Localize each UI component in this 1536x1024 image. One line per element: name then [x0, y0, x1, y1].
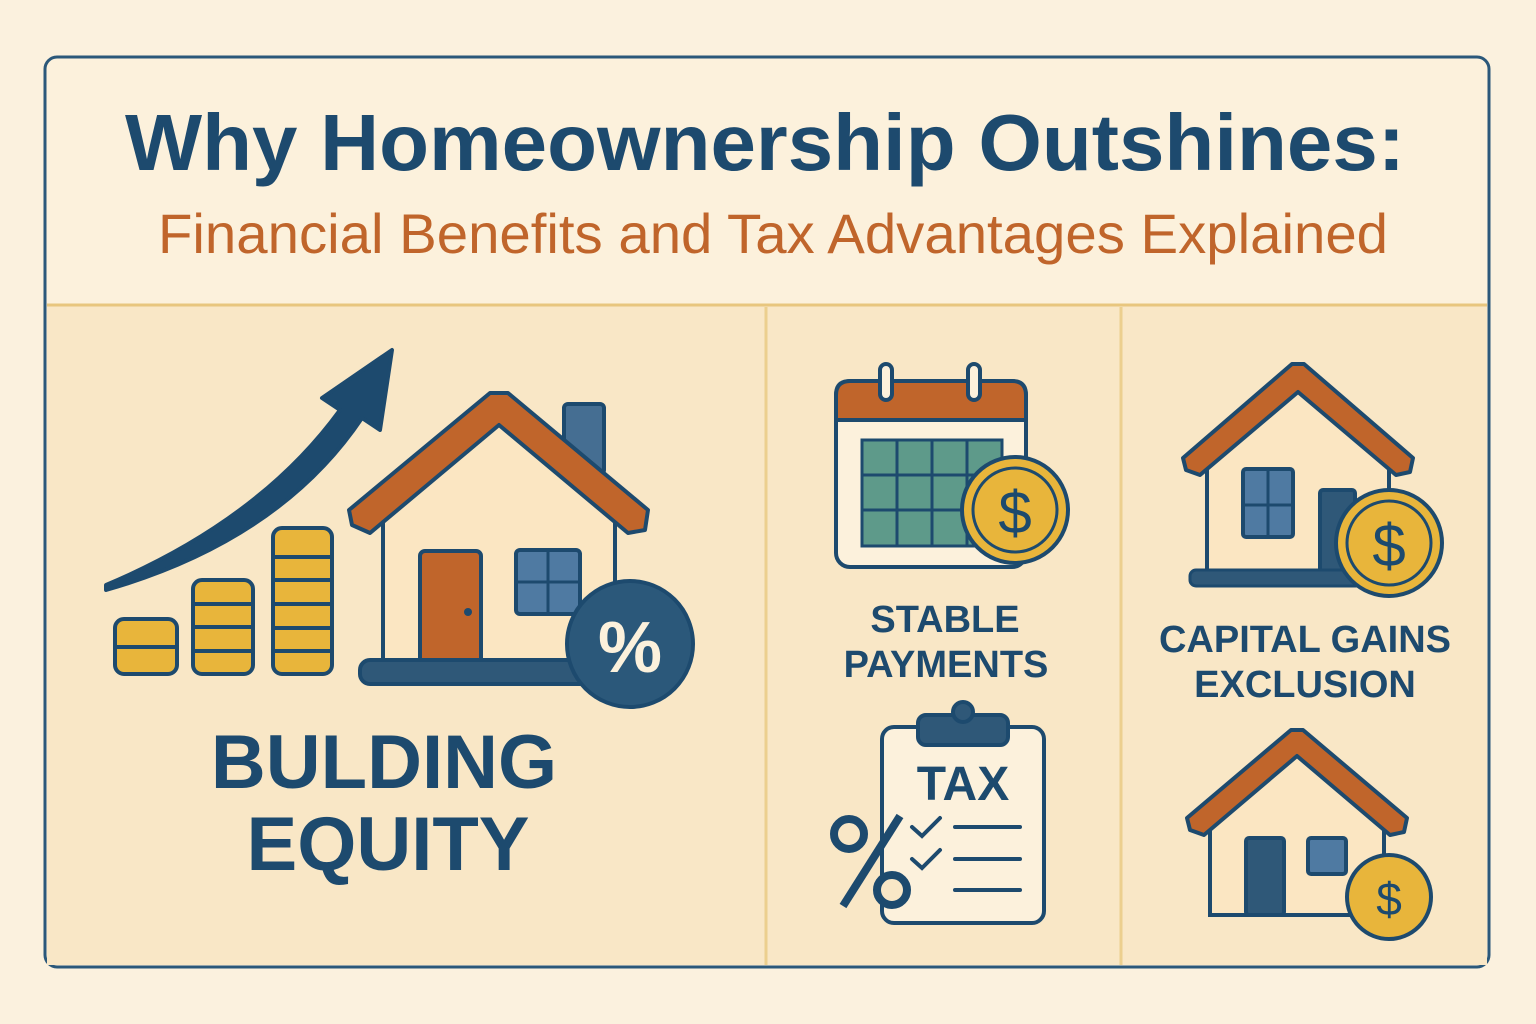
title — [125, 98, 1405, 265]
icon: calendar with dollar — [836, 364, 1068, 567]
panel: stable payments — [834, 364, 1068, 923]
icon: tax clipboard — [834, 702, 1044, 923]
heading: building equity: BULDING — [211, 720, 557, 805]
title: Financial Benefits and Tax Advantages Explained — [158, 202, 1388, 265]
title: Why Homeownership Outshines: — [125, 98, 1405, 187]
icon: house with percent — [349, 393, 693, 707]
panel: capital gains exclusion: EXCLUSION — [1194, 664, 1416, 706]
icon: house with dollar (top): $ — [1372, 512, 1406, 579]
heading: capital gains exclusion: CAPITAL GAINS — [1159, 619, 1451, 661]
icon: house with dollar (bottom): $ — [1376, 873, 1402, 925]
panel: stable payments: PAYMENTS — [844, 644, 1048, 686]
panel: capital gains exclusion — [1159, 364, 1451, 939]
icon: growth arrow — [106, 350, 392, 590]
icon: tax clipboard: TAX — [917, 758, 1009, 811]
panel: building equity — [106, 350, 693, 887]
icon: calendar with dollar: $ — [998, 479, 1032, 546]
heading: stable payments: STABLE — [870, 599, 1020, 641]
icon: coin stacks — [115, 528, 332, 674]
icon: house with percent: % — [598, 608, 662, 688]
icon: house with dollar (top) — [1183, 364, 1442, 596]
icon: house with dollar (bottom) — [1187, 730, 1431, 939]
panel: building equity: EQUITY — [247, 802, 529, 887]
